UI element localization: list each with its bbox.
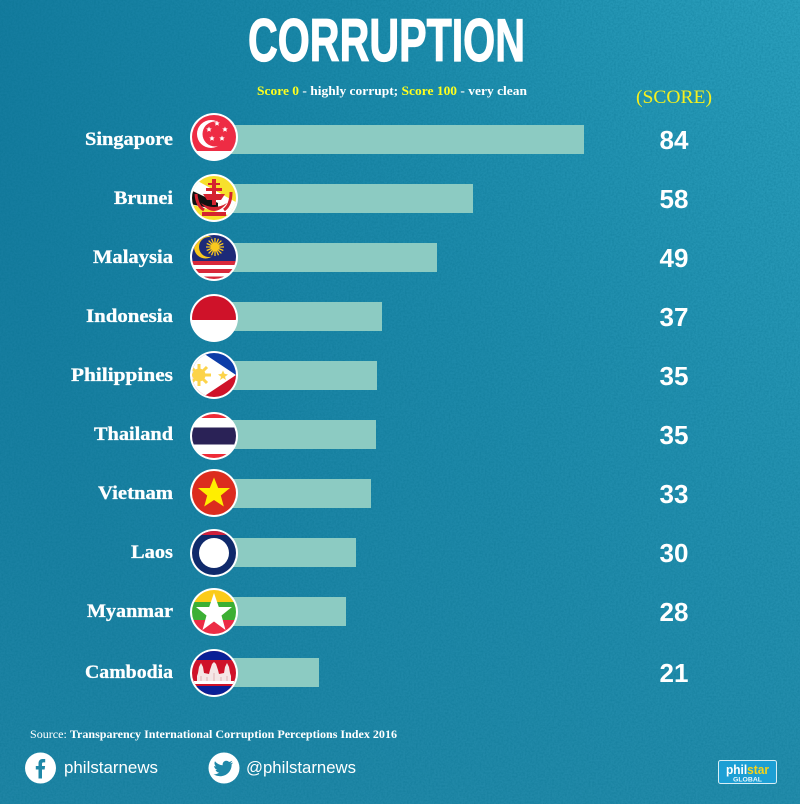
flag: Laos	[190, 529, 238, 577]
row: Singapore	[85, 113, 689, 161]
row: Thailand: 35	[660, 420, 688, 450]
flag: Indonesia	[190, 294, 238, 342]
twitter handle: @philstarnews	[246, 759, 356, 777]
logo: philstar global: philstar	[726, 762, 769, 777]
row: Laos	[131, 529, 688, 577]
row: Philippines: 35	[660, 361, 688, 391]
row: Vietnam: 33	[660, 479, 688, 509]
row: Thailand: Thailand	[94, 424, 173, 445]
flag: Malaysia	[190, 233, 238, 281]
flag: Singapore	[190, 113, 238, 161]
flag: Cambodia	[190, 649, 238, 697]
row: Laos: 30	[660, 538, 688, 568]
row: Malaysia: 49	[660, 243, 688, 273]
twitter handle	[208, 752, 356, 784]
title: CORRUPTION	[248, 7, 525, 74]
flag: Brunei	[190, 174, 238, 222]
row: Philippines	[71, 351, 688, 399]
source note: Source: Transparency International Corruption Perceptions Index 2016	[30, 729, 397, 741]
score column heading: (SCORE)	[636, 87, 712, 108]
row: Indonesia	[86, 294, 688, 342]
row: Brunei: 58	[660, 184, 688, 214]
row: Singapore: Singapore	[85, 129, 173, 150]
row: Thailand	[94, 412, 688, 460]
facebook handle: philstarnews	[64, 759, 158, 777]
row: Vietnam	[98, 469, 688, 517]
flag: Philippines	[188, 351, 238, 399]
logo: philstar global	[718, 760, 776, 784]
logo: philstar global: GLOBAL	[733, 778, 762, 784]
row: Singapore: 84	[660, 125, 689, 155]
row: Indonesia: Indonesia	[86, 306, 174, 327]
flag: Myanmar	[190, 588, 238, 636]
row: Malaysia	[93, 233, 688, 281]
facebook handle	[25, 752, 158, 784]
flag: Thailand	[190, 412, 238, 460]
row: Brunei: Brunei	[114, 188, 173, 209]
flag: Vietnam	[190, 469, 238, 517]
row: Myanmar	[87, 588, 688, 636]
row: Cambodia	[85, 649, 688, 697]
row: Myanmar: 28	[660, 597, 688, 627]
row: Cambodia: Cambodia	[85, 662, 174, 683]
row: Vietnam: Vietnam	[98, 483, 173, 504]
subtitle: score scale: Score 0 - highly corrupt; Score 100 - very clean	[257, 84, 527, 98]
row: Brunei	[114, 174, 688, 222]
row: Laos: Laos	[131, 542, 173, 563]
row: Cambodia: 21	[660, 658, 688, 688]
row: Myanmar: Myanmar	[87, 601, 174, 622]
row: Malaysia: Malaysia	[93, 247, 174, 268]
row: Indonesia: 37	[660, 302, 688, 332]
row: Philippines: Philippines	[71, 365, 173, 386]
